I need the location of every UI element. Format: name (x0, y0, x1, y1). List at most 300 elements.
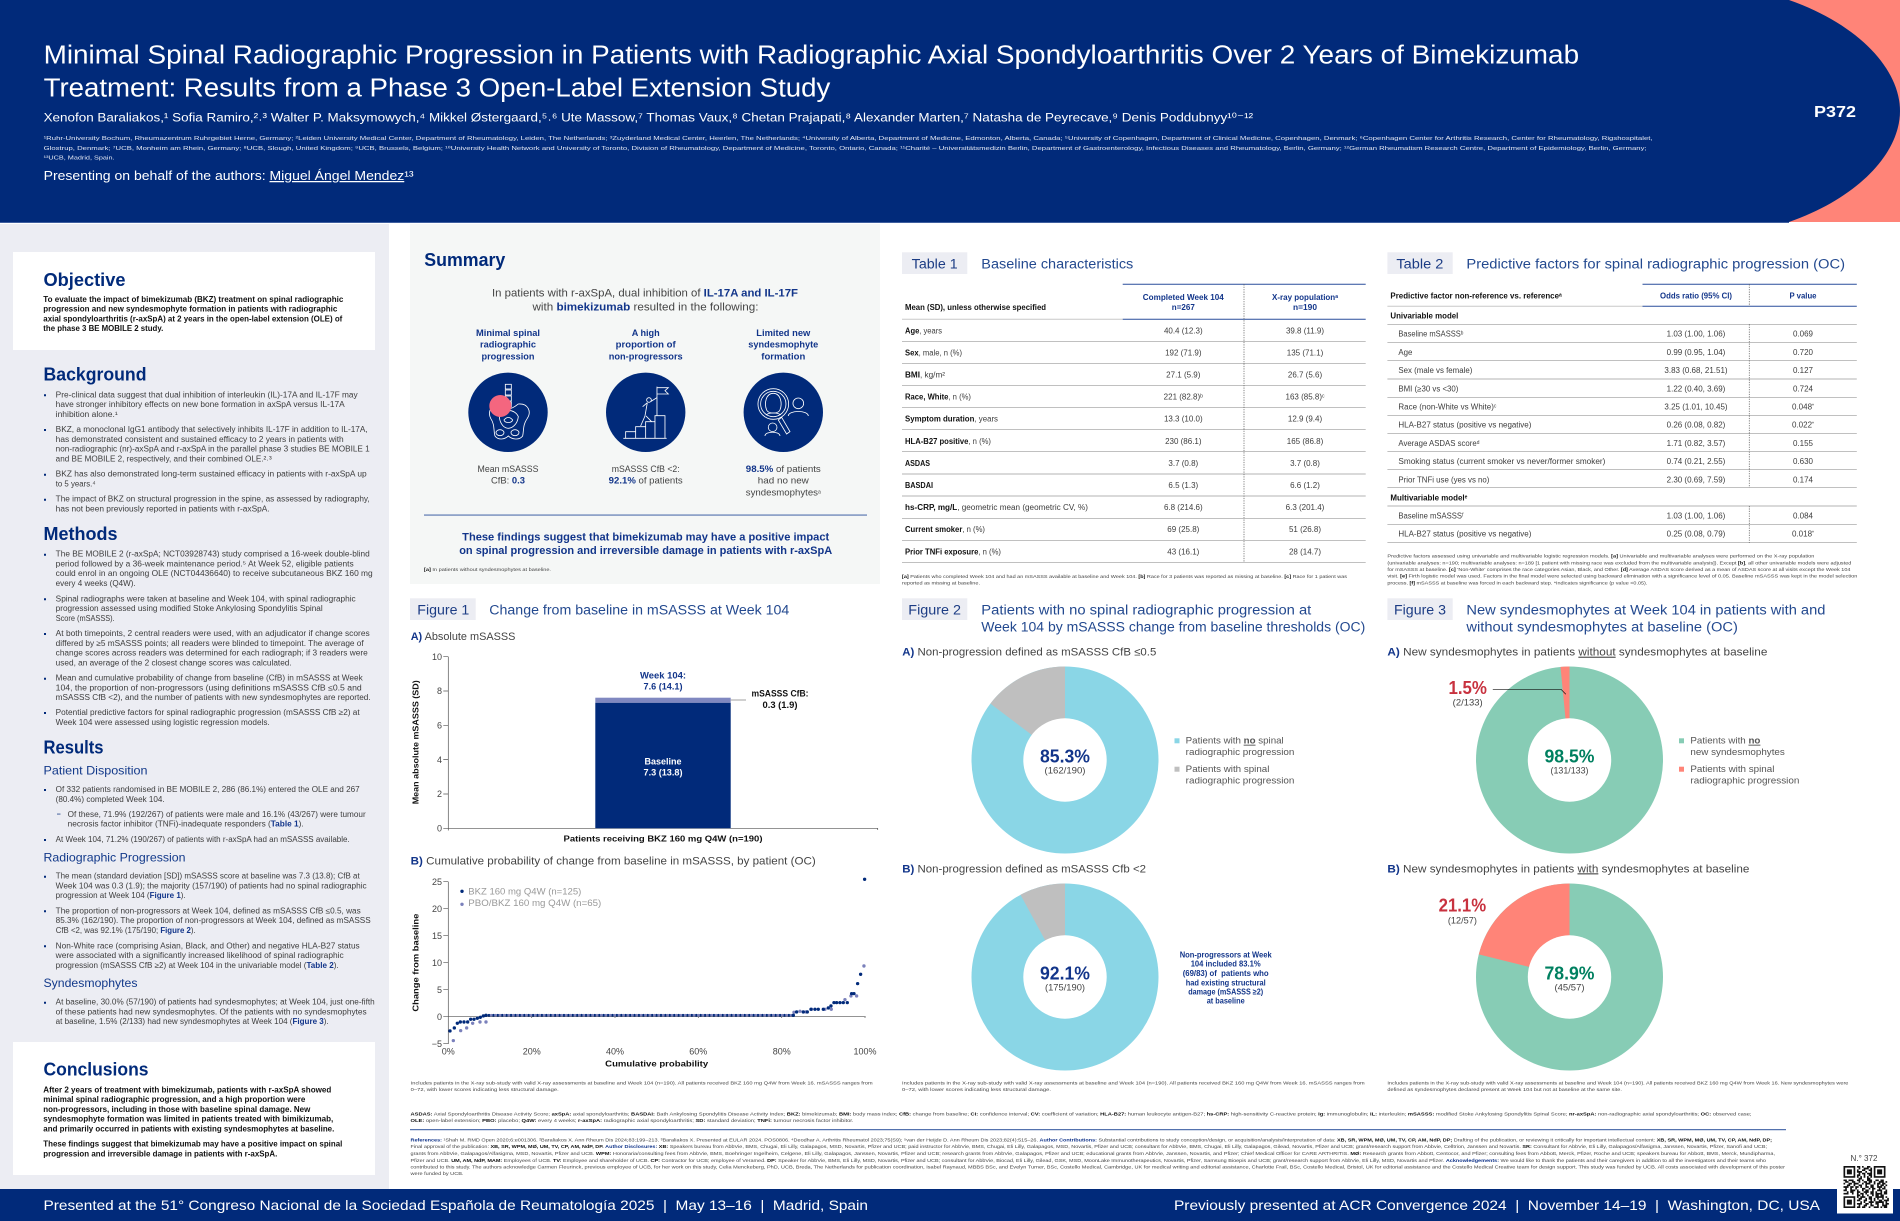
figure 3 heading: Figure 3 (1394, 602, 1446, 617)
table 2 footnote: Predictive factors assessed using univariable and multivariable logistic regression models. [a] Univariable and multivariable analyses were performed on the X-ray population (1387, 554, 1815, 560)
summary conclusion: These findings suggest that bimekizumab may have a positive impact (462, 531, 830, 543)
figure 1 (410, 598, 878, 1093)
donut chart: 78.9%: (45/57) (1554, 983, 1584, 993)
table 2 rows: 0.26 (0.08, 0.82) (1667, 421, 1726, 430)
scatter chart: cumulative probability: 25 (432, 877, 442, 887)
table 2 rows: Multivariable model (1390, 493, 1465, 502)
affiliations: ¹³UCB, Madrid, Spain. (44, 156, 115, 162)
chart legend: PBO/BKZ 160 mg Q4W (n=65) (468, 898, 601, 908)
section: methods: differed by ≥5 mSASSS points; all readers were blinded to timepoint. The average of (56, 639, 365, 648)
chart A label: A) New syndesmophytes in patients without syndesmophytes at baseline (1387, 647, 1767, 659)
section: methods: Score (mSASSS). (56, 614, 115, 623)
figure 2 heading (902, 598, 1365, 635)
affiliations: Glostrup, Denmark; ⁷UCB, Monheim am Rhein, Germany; ⁸UCB, Slough, United Kingdom; ⁹UCB, Brussels, Belgium; ¹⁰University Health Network and University of Toronto, Division of Rheumatology, Department of Medicine, Toronto, Ontario, Canada; ¹¹Charité – Universitätsmedizin Berlin, Department of Gastroenterology, Infectious Diseases and Rheumatology, Berlin, Germany; ¹²German Rheumatism Research Centre, Department of Epidemiology, Berlin, Germany; (44, 145, 1647, 152)
table 2 rows: 0.018 (1792, 530, 1812, 538)
table 1 rows: 135 (71.1) (1287, 348, 1324, 357)
QR code box: N.° 372 (1850, 1153, 1878, 1163)
table 2 rows: 0.084 (1793, 511, 1814, 520)
table 1 rows: 69 (25.8) (1167, 525, 1200, 534)
table 2 rows: * (1812, 422, 1814, 428)
table 1 header: X-ray population (1272, 293, 1335, 302)
bar chart: absolute mSASSS: Week 104: (640, 670, 686, 680)
table 1 header: Mean (SD), unless otherwise specified (905, 303, 1046, 312)
title (44, 41, 1579, 103)
figure 1 footnote: 0–72, with lower scores indicating less structural damage. (411, 1087, 559, 1093)
callout: 1.5%: (2/133) (1453, 698, 1483, 708)
summary intro (492, 288, 798, 313)
section: results: of these patients had new syndesmophytes. Of the patients with no syndesmophytes (56, 1007, 367, 1016)
section: background: Background (44, 364, 146, 385)
legend: Patients with no spinal (1186, 736, 1284, 746)
authors: Xenofon Baraliakos,¹ Sofia Ramiro,²˒³ Walter P. Maksymowych,⁴ Mikkel Østergaard,⁵˒⁶ Ute Massow,⁷ Thomas Vaux,⁸ Chetan Prajapati,⁸ Alexander Marten,⁷ Natasha de Peyrecave,⁹ Denis Poddubnyy¹⁰⁻¹² (44, 110, 1253, 124)
figure 1 heading (410, 598, 790, 620)
table 1 rows: 165 (86.8) (1287, 437, 1324, 446)
section: methods: Spinal radiographs were taken at baseline and Week 104, with spinal radiographic (56, 594, 356, 603)
callout: non-progressors: at baseline (1207, 997, 1245, 1006)
figure 2 footnote: 0–72, with lower scores indicating less structural damage. (902, 1087, 1051, 1093)
section: background: and BE MOBILE 2, respectively, and their combined OLE.²˒³ (56, 454, 272, 463)
summary column: minimal progression: radiographic (480, 340, 536, 351)
table 1 rows: Symptom duration, years (905, 415, 998, 424)
section: methods: Methods (44, 523, 118, 544)
donut chart: 98.5%: 98.5% (1544, 745, 1594, 766)
summary column: non-progressors: A high (632, 328, 660, 339)
bar chart: absolute mSASSS: mSASSS CfB: (752, 689, 808, 699)
chart A label: A) Non-progression defined as mSASSS CfB ≤0.5 (902, 647, 1156, 659)
panel: summary (410, 224, 880, 584)
table 2 rows: Baseline mSASSS (1398, 330, 1465, 339)
callout: non-progressors: Non-progressors at Week (1180, 950, 1272, 959)
table 1 rows: 221 (82.8) (1164, 393, 1200, 402)
table 2 header: a (1559, 293, 1562, 299)
callout: non-progressors: 104 included 83.1% (1191, 960, 1261, 969)
section: results: Patient Disposition (44, 764, 148, 778)
table 2 header: Predictive factor non-reference vs. reference (1390, 292, 1560, 301)
figure 1 heading: Figure 1 (417, 602, 469, 617)
legend: Patients with no (1690, 736, 1761, 746)
section: results (44, 736, 375, 1026)
table 2 rows: 3.25 (1.01, 10.45) (1664, 402, 1728, 412)
table 1 rows: BASDAI (905, 481, 933, 490)
summary intro: In patients with r-axSpA, dual inhibition of IL-17A and IL-17F (492, 288, 798, 300)
QR code box (1837, 1147, 1893, 1214)
section: background: have stronger inhibitory effects on new bone formation in axSpA versus IL-17A (56, 400, 345, 409)
table 2 rows: Smoking status (current smoker vs never/former smoker) (1398, 457, 1606, 466)
figure 3 footnote (1387, 1080, 1849, 1093)
data points (448, 878, 866, 1042)
table 1 rows: Age, years (905, 326, 942, 335)
summary conclusion (459, 531, 832, 557)
section: results: at baseline, 1.5% (2/133) had new syndesmophytes at Week 104 (Figure 3). (56, 1017, 329, 1026)
table 2 rows: c (1494, 404, 1497, 410)
section: results: At baseline, 30.0% (57/190) of patients had syndesmophytes; at Week 104, just one-fifth (56, 998, 375, 1007)
scatter chart: cumulative probability: 100% (853, 1046, 877, 1056)
chart A label: A) Absolute mSASSS (411, 631, 515, 643)
panel: conclusions: non-progressors, including in those with baseline spinal damage. New (43, 1105, 311, 1114)
table 2 rows: Prior TNFi use (yes vs no) (1398, 475, 1490, 484)
scatter chart: cumulative probability: 20 (432, 904, 442, 914)
table 1 rows: 39.8 (11.9) (1286, 326, 1324, 335)
icon: QR code (1844, 1166, 1889, 1208)
figure 2 footnote (902, 1080, 1365, 1093)
table 1 rows: 6.6 (1.2) (1290, 481, 1320, 490)
callout: non-progressors: had existing structural (1186, 978, 1266, 987)
section: results: Week 104 was 0.3 (1.9); the majority (157/190) of patients had no spinal radiographic (56, 882, 367, 890)
figure 2 footnote: Includes patients in the X-ray sub-study with valid X-ray assessments at baseline and Week 104 (n=190). All patients received BKZ 160 mg Q4W from Week 16. mSASSS ranges from (902, 1080, 1365, 1086)
callout: 1.5% (1448, 677, 1566, 708)
summary column: minimal progression (468, 328, 548, 487)
footer bar: Presented at the 51° Congreso Nacional de la Sociedad Española de Reumatología 2025 | May 13–16 | Madrid, Spain (44, 1197, 868, 1213)
figure 3 heading (1387, 598, 1825, 635)
section: methods: Mean and cumulative probability of change from baseline (CfB) in mSASSS at Week (56, 674, 364, 683)
table 2 rows: 3.83 (0.68, 21.51) (1664, 366, 1728, 375)
table 1 footnote (902, 574, 1348, 587)
table 2 footnote: process. [f] mSASSS at baseline was forced in each backward step. *Indicates significance (p value <0.05). (1387, 580, 1647, 586)
table 1 rows: 13.3 (10.0) (1164, 415, 1203, 424)
donut chart: 85.3% (972, 666, 1158, 854)
table 2 rows: 0.630 (1793, 457, 1814, 466)
table 1 rows (905, 326, 1325, 556)
icon: spine and pelvis (468, 373, 548, 452)
section: methods (44, 523, 373, 727)
summary column: syndesmophytes: syndesmophyte (748, 340, 818, 351)
section: results: Of these, 71.9% (192/267) of patients were male and 16.1% (43/267) were tumour (68, 810, 366, 819)
table 1 rows: 3.7 (0.8) (1168, 459, 1199, 468)
panel: conclusions: After 2 years of treatment with bimekizumab, patients with r-axSpA showed (43, 1085, 331, 1094)
summary column: syndesmophytes: 98.5% of patients (746, 464, 821, 475)
bar chart: absolute mSASSS: Baseline (644, 756, 682, 766)
table 2 rows: 1.22 (0.40, 3.69) (1667, 384, 1726, 393)
table 2 rows: 0.022 (1792, 421, 1812, 430)
summary column: non-progressors: mSASSS CfB <2: (612, 464, 680, 475)
scatter chart: cumulative probability: 10 (432, 958, 442, 968)
table 2 footnote: visit. [e] Firth logistic model was used. Factors in the final model were selected using backward elimination with a significance level of 0.05. Baseline mSASSS was kept in the model selection (1387, 574, 1858, 580)
bar chart: absolute mSASSS: 7.3 (13.8) (644, 768, 682, 778)
panel: summary: Summary (424, 249, 506, 270)
table 1 rows: 43 (16.1) (1167, 547, 1200, 556)
summary column: syndesmophytes: a (818, 489, 821, 495)
table 2 rows: Age (1398, 348, 1413, 357)
scatter chart: cumulative probability: 15 (432, 931, 442, 941)
panel: objective: axial spondyloarthritis (r-axSpA) at 2 years in the open-label extension (OLE) of (43, 314, 343, 323)
panel: conclusions: These findings suggest that bimekizumab may have a positive impact on spinal (43, 1140, 342, 1149)
references and disclosures: References: ¹Shah M. RMD Open 2020;6:e001306. ²Baraliakos X. Ann Rheum Dis 2024;83:199–213. ³Baraliakos X. Presented at EULAR 2024. POS0806. ⁴Deodhar A. Arthritis Rheumatol 2023;75(S9); ⁵van der Heijde D. Ann Rheum Dis 2023;82(4):515–26. Author Contributions: Substantial contributions to study conception/design, or acquisition/analysis/interpretation of data: XB, SR, WPM, MØ, UM, TV, CP, AM, NdP, DP; Drafting of the publication, or reviewing it critically for important intellectual content: XB, SR, WPM, MØ, UM, TV, CP, AM, NdP, DP; (410, 1138, 1772, 1144)
table 2 rows: 1.71 (0.82, 3.57) (1667, 439, 1726, 448)
table 2 rows: 0.74 (0.21, 2.55) (1667, 457, 1726, 466)
section: methods: could enrol in an ongoing OLE (NCT04436640) to receive subcutaneous BKZ 160 mg (56, 569, 373, 578)
summary column: non-progressors: proportion of (616, 340, 677, 351)
legend: radiographic progression (1186, 776, 1294, 786)
figure 2 heading: Figure 2 (908, 602, 961, 617)
table 1 footnote: [a] Patients who completed Week 104 and had an mSASSS available at baseline and Week 104. [b] Race for 3 patients was reported as missing at baseline. [c] Race for 1 patient was (902, 574, 1348, 580)
table 1 header: Completed Week 104 (1143, 293, 1224, 302)
table 1 rows: HLA-B27 positive, n (%) (905, 437, 991, 446)
section: background: has not been previously reported in patients with r-axSpA. (56, 504, 270, 513)
panel: conclusions: progression and irreversible damage in patients with r-axSpA. (43, 1149, 277, 1158)
legend: new syndesmophytes (1690, 747, 1785, 757)
donut chart: 98.5% (1448, 666, 1663, 854)
summary column: syndesmophytes: syndesmophytes (746, 487, 817, 498)
figure 2 heading: Week 104 by mSASSS change from baseline thresholds (OC) (981, 620, 1365, 635)
summary column: non-progressors (606, 328, 685, 487)
abbreviations: ASDAS: Axial Spondyloarthritis Disease Activity Score; axSpA: axial spondyloarthritis; BASDAI: Bath Ankylosing Spondylitis Disease Activity Index; BKZ: bimekizumab; BMI: body mass index; CfB: change from baseline; CI: confidence interval; CV: coefficient of variation; HLA-B27: human leukocyte antigen-B27; hs-CRP: high-sensitivity C-reactive protein; Ig: immunoglobulin; IL: interleukin; mSASSS: modified Stoke Ankylosing Spondylitis Spinal Score; nr-axSpA: non-radiographic axial spondyloarthritis; OC: observed case; (410, 1111, 1752, 1117)
section: results: At Week 104, 71.2% (190/267) of patients with r-axSpA had an mSASSS available. (56, 835, 350, 844)
panel: objective: To evaluate the impact of bimekizumab (BKZ) treatment on spinal radiographic (43, 295, 344, 304)
references and disclosures: Final approval of the publication: XB, SR, WPM, MØ, UM, TV, CP, AM, NdP, DP. Author Disclosures: XB: Speakers bureau from AbbVie, BMS, Chugai, Eli Lilly, Galapagos, MSD, Novartis, Pfizer and UCB; paid instructor for AbbVie, BMS, Chugai, Eli Lilly, Galapagos, MSD, Novartis, Pfizer and UCB; consultant for AbbVie, BMS, Chugai, Eli Lilly, Galapagos, Gilead, Novartis, Pfizer and UCB; grant/research support from Abbvie, Celltrion, Janssen and Novartis. SR: Consultant for AbbVie, Eli Lilly, Galapagos/Alfasigma, Janssen, Novartis, Pfizer, Sanofi and UCB; (410, 1144, 1767, 1150)
summary intro: with bimekizumab resulted in the following: (531, 301, 759, 313)
table 2 rows: HLA-B27 status (positive vs negative) (1398, 421, 1532, 430)
bar chart: absolute mSASSS: Patients receiving BKZ 160 mg Q4W (n=190) (564, 833, 763, 843)
presenter: Presenting on behalf of the authors: Miguel Ángel Mendez ¹³ (44, 168, 414, 183)
bar chart: absolute mSASSS: 8 (437, 686, 442, 696)
section: results: Results (44, 736, 104, 758)
summary conclusion: on spinal progression and irreversible damage in patients with r-axSpA (459, 545, 832, 557)
summary column: minimal progression: progression (482, 351, 535, 362)
scatter chart: cumulative probability: Cumulative probability (605, 1058, 708, 1068)
table 1 rows: 192 (71.9) (1165, 348, 1202, 357)
scatter chart: cumulative probability: 80% (773, 1046, 791, 1056)
summary column: syndesmophytes: Limited new (756, 328, 811, 339)
summary column: minimal progression: CfB: 0.3 (491, 476, 525, 487)
footer bar (0, 1189, 1900, 1221)
callout: 1.5%: 1.5% (1448, 677, 1487, 698)
figure 1 footnote (411, 1080, 873, 1093)
table 2 rows: HLA-B27 status (positive vs negative) (1398, 530, 1532, 538)
section: methods: every 4 weeks (Q4W). (56, 579, 136, 588)
table 2 rows: f (1462, 512, 1464, 518)
table 1 heading: Table 1 (912, 256, 958, 271)
section: methods: change scores across readers was determined for each radiograph; if 3 readers were (56, 649, 368, 658)
scatter chart: cumulative probability: 40% (606, 1046, 624, 1056)
table 2 header: P value (1790, 292, 1817, 301)
section: results: Non-White race (comprising Asian, Black, and Other) and negative HLA-B27 status (56, 941, 360, 950)
table 1 rows: ASDAS (905, 459, 931, 468)
scatter chart: cumulative probability: Change from baseline (410, 913, 420, 1012)
panel: conclusions (13, 1042, 375, 1175)
summary column: syndesmophytes: had no new (758, 476, 809, 487)
table 1 rows: 163 (85.8) (1286, 393, 1322, 402)
donut chart: 78.9% (1439, 884, 1663, 1070)
table 2 rows: 0.99 (0.95, 1.04) (1667, 348, 1726, 357)
bar chart: absolute mSASSS (410, 652, 878, 843)
section: results: The proportion of non-progressors at Week 104, defined as mSASSS CfB ≤0.5, was (56, 906, 361, 915)
scatter chart: cumulative probability (410, 877, 877, 1068)
donut chart: 92.1%: (175/190) (1045, 983, 1085, 993)
scatter chart: cumulative probability: 0 (437, 1012, 442, 1022)
section: methods: 104, the proportion of non-progressors (using definitions mSASSS CfB ≤0.5 and (56, 683, 362, 692)
legend: radiographic progression (1186, 747, 1294, 757)
title: Minimal Spinal Radiographic Progression in Patients with Radiographic Axial Spondyloarthritis Over 2 Years of Bimekizumab (44, 41, 1579, 69)
section: methods: period followed by a 36-week maintenance period.⁵ At Week 52, eligible patients (56, 559, 354, 568)
donut chart: 98.5%: (131/133) (1550, 765, 1588, 775)
bar chart: absolute mSASSS: 4 (437, 755, 442, 765)
panel: conclusions: and primarily occurred in patients with existing syndesmophytes at baseline. (43, 1124, 334, 1133)
section: background: has demonstrated consistent and sustained efficacy to 2 years in patients with (56, 435, 344, 444)
section: methods: At both timepoints, 2 central readers were used, with an adjudicator if change scores (56, 629, 370, 638)
references and disclosures: were funded by UCB. (410, 1171, 464, 1177)
chart B label: B) Non-progression defined as mSASSS Cfb <2 (902, 863, 1146, 875)
table 2 rows: Baseline mSASSS (1398, 511, 1465, 520)
table 2 rows: 0.048 (1792, 402, 1812, 412)
table 1 header: a (1335, 294, 1338, 300)
section: results: progression at Week 104 (Figure 1). (56, 891, 186, 900)
abbreviations: OLE: open-label extension; PBO: placebo; Q4W: every 4 weeks; r-axSpA: radiographic axial spondyloarthritis; SD: standard deviation; TNFi: tumour necrosis factor inhibitor. (410, 1118, 854, 1124)
table 1 rows: 51 (26.8) (1289, 525, 1321, 534)
table 2: predictive factors (1387, 252, 1858, 586)
panel: objective: the phase 3 BE MOBILE 2 study. (43, 324, 163, 333)
scatter chart: cumulative probability: 20% (523, 1046, 541, 1056)
table 2 rows: d (1477, 440, 1480, 446)
chart legend: BKZ 160 mg Q4W (n=125) (468, 887, 581, 897)
section: results: Of 332 patients randomised in BE MOBILE 2, 286 (86.1%) entered the OLE and 267 (56, 785, 360, 794)
donut chart: 78.9%: 78.9% (1544, 963, 1594, 984)
abbreviations (410, 1111, 1752, 1124)
table 1 header: n=190 (1293, 303, 1318, 312)
section: background: inhibition alone.¹ (56, 410, 118, 419)
table 1 rows: 6.3 (201.4) (1286, 503, 1325, 512)
section: methods: The BE MOBILE 2 (r-axSpA; NCT03928743) study comprised a 16-week double-blind (56, 550, 370, 559)
summary column: non-progressors: 92.1% of patients (609, 476, 683, 487)
scatter chart: cumulative probability: 5 (437, 985, 442, 995)
legend: radiographic progression (1690, 776, 1799, 786)
section: background (44, 364, 370, 513)
bar chart: absolute mSASSS: 6 (437, 720, 442, 730)
references and disclosures (410, 1138, 1785, 1177)
donut chart: 92.1% (972, 884, 1158, 1070)
table 1 rows: b (1200, 394, 1203, 400)
table 1 rows: Race, White, n (%) (905, 393, 971, 402)
summary column: syndesmophytes: formation (761, 351, 805, 362)
table 2 heading: Table 2 (1396, 256, 1443, 271)
table 2 rows: 2.30 (0.69, 7.59) (1667, 475, 1726, 484)
figure 2 heading: Patients with no spinal radiographic progression at (981, 602, 1312, 617)
section: methods: used, an average of the 2 closest change scores was calculated. (56, 658, 292, 667)
summary column: minimal progression: Minimal spinal (476, 328, 540, 339)
affiliations: ¹Ruhr-University Bochum, Rheumazentrum Ruhrgebiet Herne, Germany; ²Leiden University Medical Center, Department of Rheumatology, Leiden, The Netherlands; ³Zuyderland Medical Center, Heerlen, The Netherlands; ⁴University of Alberta, Department of Medicine, Edmonton, Alberta, Canada; ⁵University of Copenhagen, Department of Clinical Medicine, Copenhagen, Denmark; ⁶Copenhagen Center for Arthritis Research, Center for Rheumatology, Rigshospitalet, (44, 135, 1653, 142)
legend: Patients with spinal (1690, 764, 1774, 774)
figure 3 heading: without syndesmophytes at baseline (OC) (1465, 620, 1738, 635)
affiliations (44, 135, 1653, 162)
section: background: The impact of BKZ on structural progression in the spine, as assessed by radiography, (56, 495, 370, 504)
table 1 rows: BMI, kg/m² (905, 370, 945, 380)
legend (1174, 736, 1294, 786)
table 1 rows: 230 (86.1) (1165, 437, 1202, 446)
summary footnote: [a] In patients without syndesmophytes at baseline. (424, 567, 551, 573)
table 2 rows: 1.03 (1.00, 1.06) (1667, 511, 1726, 520)
donut chart: 85.3%: 85.3% (1040, 745, 1090, 766)
footer bar: Previously presented at ACR Convergence 2024 | November 14–19 | Washington, DC, USA (1174, 1197, 1821, 1213)
table 1: baseline characteristics (902, 252, 1366, 587)
summary column: syndesmophytes (744, 328, 823, 498)
section: results: CfB <2, was 92.1% (175/190; Figure 2). (56, 926, 196, 935)
table 1 rows: hs-CRP, mg/L, geometric mean (geometric CV, %) (905, 503, 1088, 512)
figure 1 footnote: Includes patients in the X-ray sub-study with valid X-ray assessments at baseline and Week 104 (n=190). All patients received BKZ 160 mg Q4W from Week 16. mSASSS ranges from (411, 1080, 873, 1086)
table 1 heading: Baseline characteristics (981, 256, 1134, 271)
bar chart: absolute mSASSS: 7.6 (14.1) (644, 682, 682, 692)
callout: 21.1% (1439, 895, 1486, 925)
table 2 rows: 0.720 (1793, 348, 1814, 357)
section: results: The mean (standard deviation [SD]) mSASSS score at baseline was 7.3 (13.8); CfB at (56, 872, 360, 881)
panel: objective (13, 252, 375, 350)
section: results: progression (mSASSS CfB ≥2) at Week 104 in the univariable model ( Table 2). (56, 961, 339, 970)
references and disclosures: grants from AbbVie, Galapagos/Alfasigma, MSD, Novartis, Pfizer and UCB. WPM: Honoraria/consulting fees from AbbVie, BMS, Boehringer Ingelheim, Celgene, Eli Lilly, Galapagos, Janssen, Novartis, Pfizer and UCB; research grants from AbbVie, Galapagos, Pfizer and UCB; educational grants from AbbVie, Janssen, Novartis, and Pfizer; Chief Medical Officer for CARE ARTHRITIS. MØ: Research grants from Abbott, Centocor, and Pfizer; consulting fees from Abbott, Merck, Pfizer, Roche and UCB; speakers bureau for Abbott, BMS, Merck, Mundipharma, (410, 1151, 1775, 1157)
bar chart: absolute mSASSS: 0 (437, 824, 442, 834)
section: results: 85.3% (162/190). The proportion of non-progressors at Week 104, defined as mSASSS (56, 916, 371, 925)
table 1 rows: Current smoker, n (%) (905, 525, 985, 534)
callout: 21.1%: (12/57) (1448, 915, 1477, 925)
table 1 rows: c (1322, 394, 1325, 400)
panel: objective: progression and new syndesmophyte formation in patients with radiographic (43, 305, 338, 314)
section: results: Syndesmophytes (44, 976, 138, 990)
section: background: non-radiographic (nr)-axSpA and r-axSpA in the parallel phase 3 studies BE MOBILE 1 (56, 444, 370, 454)
panel: conclusions: Conclusions (44, 1058, 148, 1080)
bar chart: absolute mSASSS: 2 (437, 789, 442, 799)
section: results: (80.4%) completed Week 104. (56, 795, 165, 804)
table 2 rows: 0.25 (0.08, 0.79) (1667, 530, 1726, 538)
table 1 rows: 6.8 (214.6) (1164, 503, 1203, 512)
table 1 rows: 3.7 (0.8) (1290, 459, 1320, 468)
table 2 rows: 1.03 (1.00, 1.06) (1667, 330, 1726, 339)
table 2 heading: Predictive factors for spinal radiographic progression (OC) (1466, 256, 1845, 271)
table 2 rows: 0.155 (1793, 439, 1814, 448)
chart B label: B) Cumulative probability of change from baseline in mSASSS, by patient (OC) (411, 856, 816, 868)
section: methods: mSASSS CfB <2), and the number of patients with new syndesmophytes are reported. (56, 693, 371, 702)
table 2 rows: e (1465, 494, 1468, 500)
table 1 rows: 40.4 (12.3) (1164, 326, 1203, 335)
panel: objective: Objective (44, 269, 126, 290)
table 2 rows: 0.174 (1793, 475, 1814, 484)
table 2 footnote: for mSASSS at baseline. [c] ‘Non-White’ comprises the race categories Asian, Black, and Other. [d] Average ASDAS score derived as a mean of ASDAS score at all visits except the Week 104 (1387, 567, 1851, 573)
section: methods: Potential predictive factors for spinal radiographic progression (mSASSS CfB ≥2) at (56, 708, 360, 717)
donut chart: 92.1%: 92.1% (1040, 963, 1090, 984)
table 1 rows: 12.9 (9.4) (1288, 415, 1322, 424)
section: methods: progression assessed using modified Stoke Ankylosing Spondylitis Spinal (56, 604, 323, 613)
legend: Patients with spinal (1186, 764, 1269, 774)
donut chart: 85.3%: (162/190) (1044, 765, 1086, 775)
section: results: Radiographic Progression (44, 851, 186, 865)
section: results: necrosis factor inhibitor (TNFi)-inadequate responders ( Table 1). (68, 820, 304, 829)
panel: left column (0, 224, 389, 1189)
section: background: BKZ, a monoclonal IgG1 antibody that selectively inhibits IL-17F in addition to IL-17A, (56, 425, 368, 434)
table 2 footnote (1387, 554, 1858, 586)
table 2 footnote: (univariable analyses: n=190; multivariable analyses: n=189 [1 patient with missing race was excluded from the multivariable analysis]). Except [b], all other univariable models were adjusted (1387, 560, 1852, 566)
section: background: Pre-clinical data suggest that dual inhibition of interleukin (IL)-17A and IL-17F may (56, 390, 358, 399)
header banner (0, 0, 1900, 223)
table 1 rows: 26.7 (5.6) (1288, 370, 1322, 380)
table 2 rows (1390, 312, 1814, 538)
table 1 header (905, 293, 1338, 312)
table 2 rows: * (1812, 530, 1814, 536)
table 2 rows: Race (non-White vs White) (1398, 402, 1494, 412)
bar chart: absolute mSASSS: 10 (432, 652, 442, 662)
figure 3 footnote: defined as syndesmophytes declared present at Week 104 but not at baseline at the same site. (1387, 1087, 1622, 1093)
chart legend (460, 887, 601, 908)
table 2 rows: Univariable model (1390, 312, 1458, 321)
table 1 rows: 27.1 (5.9) (1166, 370, 1201, 380)
scatter chart: cumulative probability: 60% (689, 1046, 707, 1056)
title: Treatment: Results from a Phase 3 Open-Label Extension Study (44, 75, 831, 103)
table 2 rows: 0.127 (1793, 366, 1814, 375)
table 1 rows: 28 (14.7) (1289, 547, 1321, 556)
figure 3 footnote: Includes patients in the X-ray sub-study with valid X-ray assessments at baseline and Week 104 (n=190). All patients received BKZ 160 mg Q4W from Week 16. New syndesmophytes were (1387, 1080, 1849, 1086)
figure 2 (902, 598, 1365, 1093)
callout: non-progressors (1180, 950, 1272, 1006)
scatter chart: cumulative probability: −5 (432, 1039, 442, 1049)
legend (1679, 736, 1799, 786)
table 2 header (1390, 292, 1817, 301)
table 2 heading (1387, 252, 1845, 274)
section: results: were associated with a significantly increased likelihood of spinal radiographic (55, 951, 344, 960)
